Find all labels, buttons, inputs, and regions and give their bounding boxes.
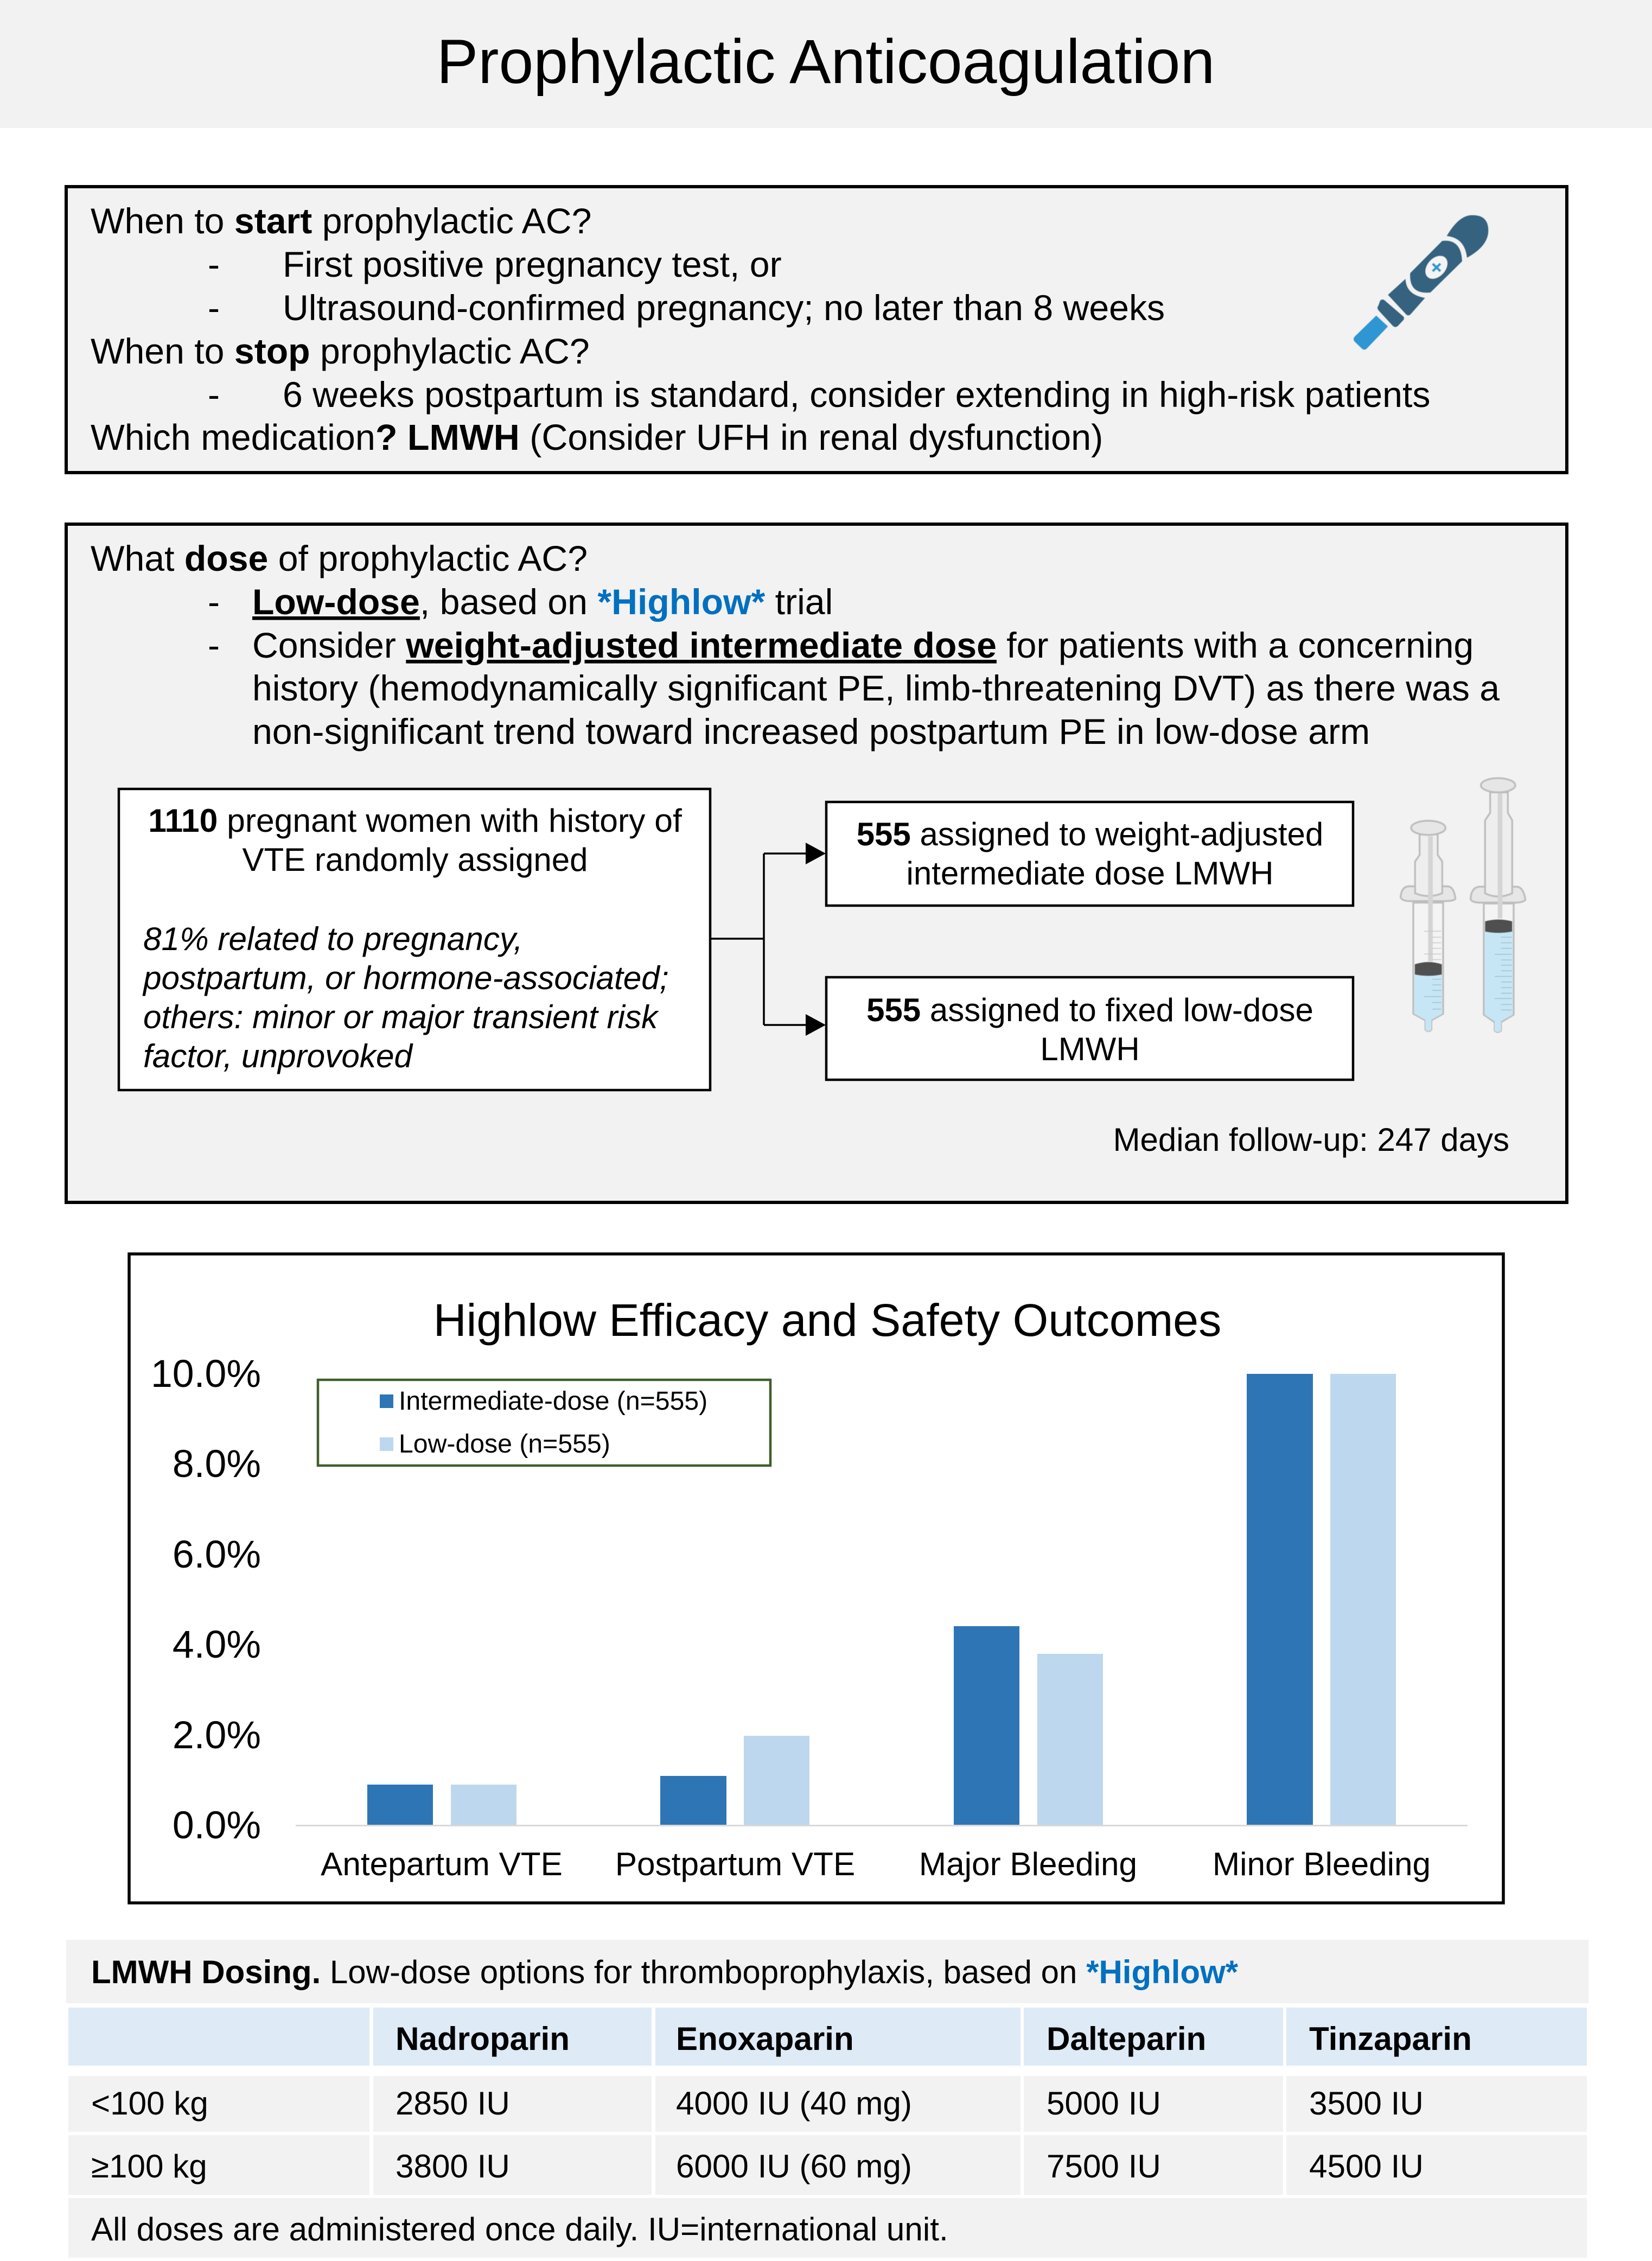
icon: syringes xyxy=(1401,778,1526,1032)
text: start option 1: First positive pregnancy test, or xyxy=(283,245,782,285)
study population box xyxy=(119,789,710,1090)
table header row: Dalteparin xyxy=(1047,2021,1206,2057)
table row: 100 kg and over xyxy=(68,2135,1587,2195)
table caption: LMWH Dosing. Low-dose options for thromboprophylaxis, based on *Highlow* xyxy=(91,1954,1239,1990)
text: start question: When to start prophylactic AC? xyxy=(91,201,591,241)
study population box: 1110 pregnant women with history of xyxy=(148,802,682,839)
box: low-dose arm: 555 assigned to fixed low-dose xyxy=(866,992,1313,1028)
study population box: 81% related to pregnancy, xyxy=(143,920,522,957)
table row: 100 kg and over: 6000 IU (60 mg) xyxy=(676,2148,912,2184)
panel: dose xyxy=(66,524,1567,1202)
text: intermediate dose consideration: weight-adjusted intermediate dose for patients with a concerning xyxy=(406,626,1474,666)
text: stop answer: - xyxy=(208,375,220,415)
text: low-dose: , based on *Highlow* trial xyxy=(420,582,833,622)
text: intermediate dose consideration: non-significant trend toward increased postpartum PE in low-dose arm xyxy=(252,712,1370,752)
y axis labels: 10.0% xyxy=(151,1352,261,1396)
study population box: others: minor or major transient risk xyxy=(143,998,659,1035)
chart legend: Low-dose (n=555) xyxy=(399,1429,610,1458)
table row: under 100 kg: 4000 IU (40 mg) xyxy=(676,2085,912,2122)
table row: under 100 kg xyxy=(68,2076,1587,2132)
chart legend: Intermediate-dose (n=555) xyxy=(399,1386,707,1416)
table header row: Enoxaparin xyxy=(676,2021,854,2057)
panel: LMWH dosing table xyxy=(66,1940,1589,2258)
y axis labels: 0.0% xyxy=(173,1804,261,1847)
bars: postpartum VTE xyxy=(660,1736,809,1825)
arrows: randomization xyxy=(711,843,826,1036)
table row: under 100 kg: 3500 IU xyxy=(1309,2085,1424,2122)
text: start option 2: - xyxy=(208,288,220,328)
table row: under 100 kg: 5000 IU xyxy=(1047,2085,1161,2122)
table row: 100 kg and over: ≥100 kg xyxy=(91,2148,207,2184)
table row: under 100 kg: <100 kg xyxy=(91,2085,208,2122)
text: start option 1: - xyxy=(208,245,220,285)
table footnote: All doses are administered once daily. IU=international unit. xyxy=(91,2211,948,2247)
y axis labels: 2.0% xyxy=(173,1714,261,1757)
chart legend xyxy=(318,1380,770,1466)
study population box: VTE randomly assigned xyxy=(243,842,588,878)
x axis labels: Major Bleeding xyxy=(919,1845,1137,1882)
table header row: Nadroparin xyxy=(396,2021,570,2057)
text: medication: Which medication? LMWH (Consider UFH in renal dysfunction) xyxy=(91,418,1103,458)
text: low-dose: Low-dose xyxy=(252,582,420,622)
y axis labels xyxy=(151,1352,261,1847)
y axis labels: 6.0% xyxy=(173,1533,261,1576)
text: low-dose: - xyxy=(208,582,220,622)
table row: under 100 kg: 2850 IU xyxy=(396,2085,510,2122)
box: intermediate arm xyxy=(826,802,1353,906)
text: intermediate dose consideration: Consider xyxy=(252,626,406,666)
table header row xyxy=(68,2008,1587,2066)
box: low-dose arm xyxy=(826,977,1353,1080)
icon: pregnancy test xyxy=(1354,215,1488,349)
table caption xyxy=(66,1940,1589,2003)
panel: bar chart outcomes xyxy=(129,1254,1503,1903)
y axis labels: 4.0% xyxy=(173,1623,261,1666)
y axis labels: 8.0% xyxy=(173,1442,261,1486)
text: dose question: What dose of prophylactic AC? xyxy=(91,539,588,579)
x axis labels: Minor Bleeding xyxy=(1213,1845,1431,1882)
table footnote xyxy=(68,2198,1587,2258)
x axis labels xyxy=(321,1845,1431,1882)
title banner: Prophylactic Anticoagulation xyxy=(437,27,1215,97)
text: start option 2: Ultrasound-confirmed pregnancy; no later than 8 weeks xyxy=(283,288,1165,328)
text: intermediate dose consideration: history (hemodynamically significant PE, limb-threatening DVT) as there was a xyxy=(252,668,1500,709)
table row: 100 kg and over: 3800 IU xyxy=(396,2148,510,2184)
text: stop answer: 6 weeks postpartum is standard, consider extending in high-risk patients xyxy=(283,375,1430,415)
bars: major bleeding xyxy=(954,1626,1103,1825)
x axis labels: Postpartum VTE xyxy=(615,1845,855,1882)
panel: when to start and stop xyxy=(66,187,1567,473)
bars: antepartum VTE xyxy=(367,1785,516,1825)
text: intermediate dose consideration: - xyxy=(208,626,220,666)
chart title: Highlow Efficacy and Safety Outcomes xyxy=(433,1295,1221,1346)
title banner xyxy=(0,0,1652,128)
text: median follow-up: Median follow-up: 247 days xyxy=(1113,1122,1509,1158)
study population box: factor, unprovoked xyxy=(143,1037,414,1074)
table row: 100 kg and over: 4500 IU xyxy=(1309,2148,1424,2184)
x axis labels: Antepartum VTE xyxy=(321,1845,563,1882)
box: intermediate arm: intermediate dose LMWH xyxy=(907,855,1273,891)
study population box: postpartum, or hormone-associated; xyxy=(142,959,669,996)
text: stop question: When to stop prophylactic AC? xyxy=(91,332,590,372)
box: intermediate arm: 555 assigned to weight-adjusted xyxy=(857,816,1323,852)
box: low-dose arm: LMWH xyxy=(1040,1031,1140,1067)
bars: minor bleeding xyxy=(1247,1374,1396,1825)
table row: 100 kg and over: 7500 IU xyxy=(1047,2148,1161,2184)
table header row: Tinzaparin xyxy=(1309,2021,1472,2057)
